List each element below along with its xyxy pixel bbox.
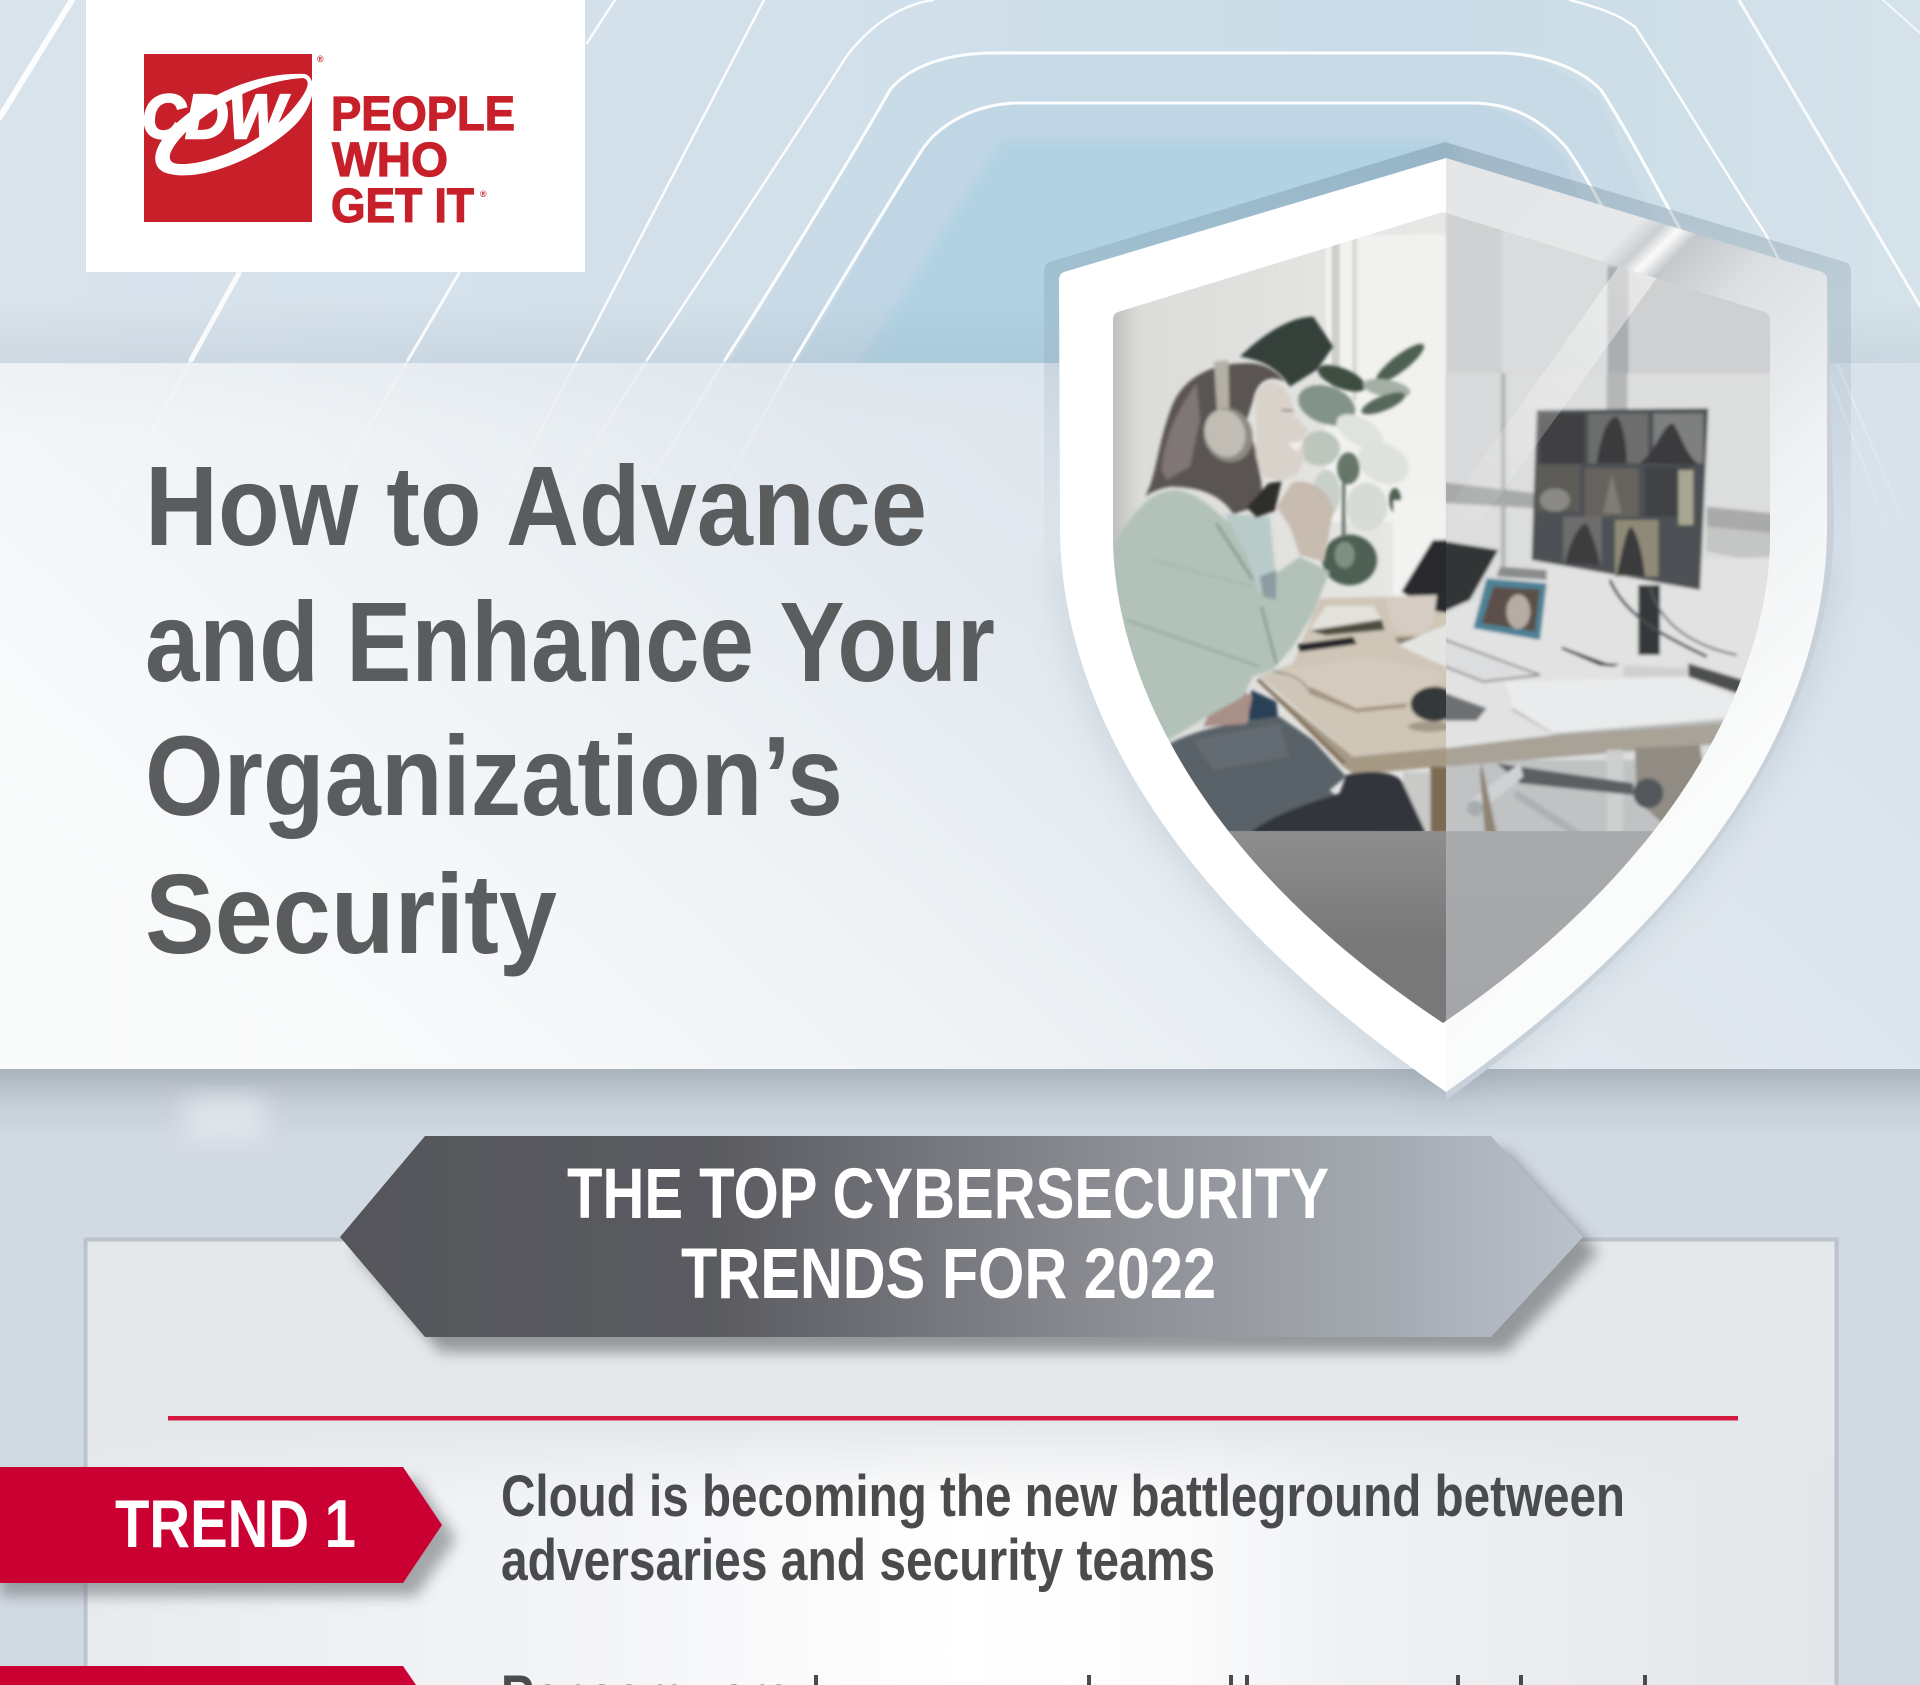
woman's body and desk <box>1113 490 1459 833</box>
logo mark: CDW <box>142 54 324 222</box>
right wall <box>1437 373 1783 840</box>
woman: hand on lap <box>1203 692 1252 727</box>
trend 1 tag <box>0 1467 456 1596</box>
desk leg <box>1430 767 1450 833</box>
background line pattern <box>0 0 1920 360</box>
desk items: mouse <box>1408 721 1451 732</box>
shield halo <box>1044 142 1851 620</box>
faded lines on title band <box>40 300 1920 640</box>
neck shadow <box>1247 481 1282 517</box>
title: How to Advance <box>145 443 927 569</box>
trend 1 text: adversaries and security teams <box>501 1528 1215 1593</box>
desk items: notebook <box>1280 657 1446 710</box>
logo mark: CDW: CDW <box>142 83 289 152</box>
monitor <box>1532 408 1708 590</box>
panel: title band <box>0 363 1920 1069</box>
logo tagline <box>331 88 515 233</box>
heading banner: TRENDS FOR 2022 <box>681 1235 1216 1314</box>
shield soft shadow <box>1060 560 1834 1104</box>
desk items: stack <box>1310 606 1382 631</box>
logo tagline: WHO <box>332 134 448 187</box>
shadow under title band <box>0 1069 1920 1140</box>
desk edge <box>1276 694 1446 775</box>
desk items: cup <box>1385 595 1437 634</box>
mouse <box>1437 690 1487 721</box>
sills <box>1440 482 1537 508</box>
woman: sweater <box>1113 490 1330 743</box>
hair <box>1145 363 1285 514</box>
boxes <box>1623 665 1687 677</box>
face <box>1255 382 1309 481</box>
trend 1 text: Cloud is becoming the new battleground between <box>501 1464 1625 1529</box>
panel: trends <box>86 1240 1836 1685</box>
sky backdrop with blue glow <box>0 0 1920 370</box>
laptop <box>1400 538 1446 615</box>
laptop <box>1437 540 1498 613</box>
shield left frame <box>1059 158 1446 1092</box>
title: Security <box>145 851 557 977</box>
monitor stand and cables <box>1610 580 1737 657</box>
red divider <box>168 1416 1738 1420</box>
logo mark: CDW: ® <box>317 54 324 64</box>
raised hand <box>1277 482 1333 562</box>
right half of photo <box>1437 373 1783 840</box>
title <box>145 443 995 977</box>
shield right frame <box>1446 158 1827 1092</box>
headphones <box>1214 360 1229 414</box>
desk top <box>1260 597 1456 757</box>
keyboard <box>1437 637 1540 682</box>
title: Organization’s <box>145 713 843 839</box>
chair <box>1467 745 1705 833</box>
desk items: keyboard <box>1398 624 1446 668</box>
trend 2 text, cut off by the page edge <box>501 1664 1647 1685</box>
desk items: phone <box>1298 637 1357 652</box>
woman: jeans <box>1170 714 1348 834</box>
shield back edge <box>1446 280 1834 1100</box>
plant <box>1240 317 1429 537</box>
plant leaf <box>1322 535 1377 585</box>
trend 2 tag <box>0 1666 416 1685</box>
shield <box>1044 142 1851 1104</box>
logo tagline: PEOPLE <box>331 88 515 141</box>
desk edge <box>1437 723 1733 767</box>
space under desk <box>1440 760 1780 840</box>
heading banner <box>340 1136 1598 1352</box>
desk surface <box>1440 557 1780 748</box>
logo tagline: ® <box>480 189 487 199</box>
heading banner: THE TOP CYBERSECURITY <box>567 1155 1329 1234</box>
picture frame <box>1473 578 1547 640</box>
wall and windows <box>1106 203 1781 841</box>
shield photo <box>1106 203 1783 1054</box>
title: and Enhance Your <box>145 579 995 705</box>
woman's head and hand <box>1145 360 1333 562</box>
woman: blue top under sweater <box>1248 690 1278 721</box>
papers <box>1505 677 1740 733</box>
glare and lower grey band <box>1106 228 1781 1054</box>
window light <box>1393 500 1446 600</box>
trend 1 text <box>501 1464 1625 1593</box>
trend 1 tag: TREND 1 <box>115 1486 356 1562</box>
logo tagline: GET IT <box>331 180 474 233</box>
pen <box>1562 647 1620 667</box>
logo panel <box>86 0 585 272</box>
